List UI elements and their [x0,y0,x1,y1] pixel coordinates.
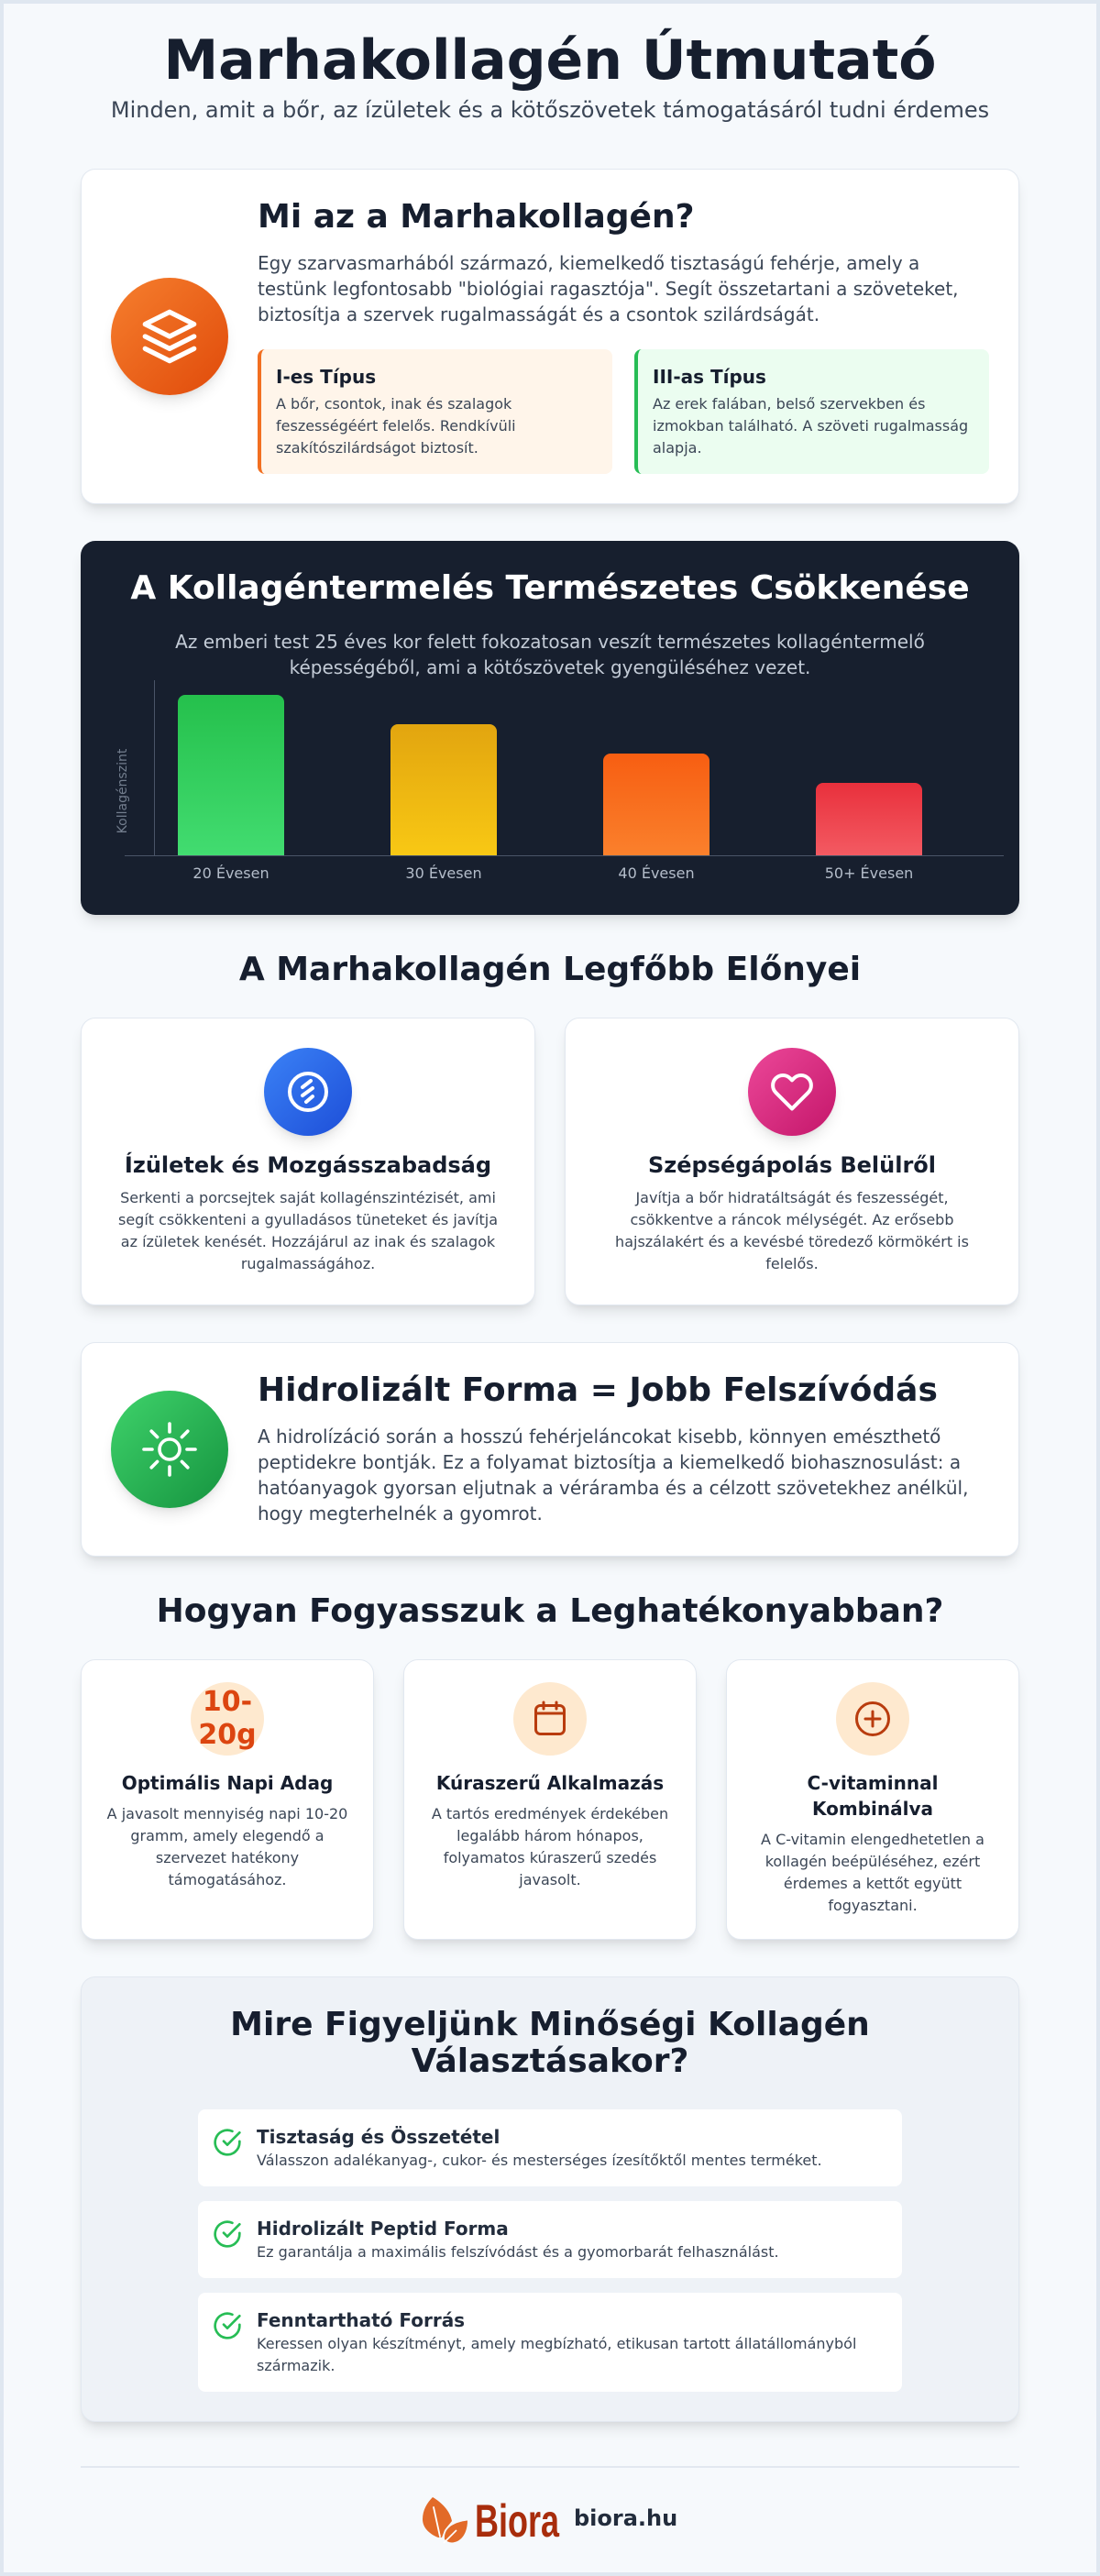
icon: dose: 10- [203,1686,252,1718]
heading: joints: Ízületek és Mozgásszabadság [125,1152,491,1178]
item: hydrolysed peptide: Hidrolizált Peptid Forma [257,2218,509,2240]
text: definition: Egy szarvasmarhából származó, kiemelkedő tisztaságú fehérje, amely a [258,252,919,274]
item: purity: Tisztaság és Összetétel [257,2126,500,2148]
text: dose [106,1805,347,1888]
label: 40 years: 40 Évesen [618,864,695,882]
text: beauty [615,1189,969,1272]
panel: quality checklist [81,1976,1019,2422]
callout: type III: izmokban található. A szöveti rugalmasság [653,417,968,435]
text: beauty: hajszálakért és a kevésbé töredező körmökért is [615,1233,969,1250]
text: decline description: Az emberi test 25 éves kor felett fokozatosan veszít természetes kollagéntermelő [175,631,925,653]
text: dose: szervezet hatékony [156,1849,299,1866]
text: dose: A javasolt mennyiség napi 10-20 [107,1805,347,1822]
website: biora.hu [574,2505,677,2531]
heading: beauty: Szépségápolás Belülről [648,1152,936,1178]
heading: quality: Választásakor? [412,2042,688,2080]
callout: type I: feszességéért felelős. Rendkívüli [276,417,516,435]
text: vitamin C: érdemes a kettőt együtt [784,1875,962,1892]
subtitle: Minden, amit a bőr, az ízületek és a kötőszövetek támogatásáról tudni érdemes [111,97,989,123]
logo [423,2495,560,2545]
text: joints: segít csökkenteni a gyulladásos tüneteket és javítja [118,1211,498,1228]
benefits grid [80,1018,1020,1315]
text: course: legalább három hónapos, [456,1827,644,1844]
heading: hydrolysed: Hidrolizált Forma = Jobb Felszívódás [258,1371,938,1409]
panel: natural decline of collagen production [81,541,1019,915]
text: joints: az ízületek kenését. Hozzájárul az inak és szalagok [121,1233,495,1250]
panel: joints [81,1018,535,1305]
text: course: javasolt. [519,1871,581,1888]
text: definition: biztosítja a szervek rugalmasságát és a csontok szilárdságát. [258,303,820,325]
heading: decline: A Kollagéntermelés Természetes Csökkenése [130,569,970,607]
callout: type I: A bőr, csontok, inak és szalagok [276,395,512,413]
bar chart [116,680,1004,882]
callout: type III [634,349,989,474]
title: Marhakollagén Útmutató [163,28,937,93]
bar: 20 years [178,695,284,855]
callout: type I: I-es Típus [276,366,376,388]
callout: type III: III-as Típus [653,366,766,388]
panel: course [403,1659,697,1940]
callout: type III: alapja. [653,439,702,457]
text: hydrolysed: hogy megterhelnék a gyomrot. [258,1503,543,1525]
callout: type I: szakítószilárdságot biztosít. [276,439,478,457]
icon: calendar [513,1682,587,1756]
text: hydrolysed: peptidekre bontják. Ez a folyamat biztosítja a kiemelkedő biohasznosulást: a [258,1451,961,1473]
text: dose: támogatásához. [168,1871,287,1888]
text: beauty: Javítja a bőr hidratáltságát és feszességét, [635,1189,949,1206]
text: hydrolysed [258,1426,968,1525]
heading: vitamin C: C-vitaminnal [808,1772,938,1794]
heading: benefits: A Marhakollagén Legfőbb Előnyei [239,951,861,988]
icon: dose: 20g [198,1719,257,1751]
text: vitamin C: kollagén beépüléséhez, ezért [765,1853,980,1870]
text: definition: testünk legfontosabb "biológiai ragasztója". Segít összetartani a szöveteket, [258,278,959,300]
text: decline description: képességéből, ami a kötőszövetek gyengüléséhez vezet. [290,656,810,678]
text: course: A tartós eredmények érdekében [432,1805,668,1822]
header [111,28,989,123]
panel: beauty [565,1018,1019,1305]
heading: quality [230,2006,870,2080]
text: beauty: csökkentve a ráncok mélységét. Az erősebb [631,1211,953,1228]
icon: layers [111,278,228,395]
panel: daily dose [81,1659,374,1940]
icon: plus [836,1682,909,1756]
heading: vitamin C: Kombinálva [812,1798,933,1820]
heading: dose: Optimális Napi Adag [122,1772,333,1794]
heading: vitamin C [808,1772,938,1820]
panel: what is beef collagen [81,169,1019,504]
collagen types [258,349,989,474]
item: hydrolysed peptide [198,2201,902,2278]
heading: quality: Mire Figyeljünk Minőségi Kollagén [230,2006,870,2043]
item: sustainable source: Keressen olyan készítményt, amely megbízható, etikusan tartott állatállományból [257,2335,856,2352]
text: course [432,1805,668,1888]
text: beauty: felelős. [765,1255,819,1272]
icon: joint [264,1048,352,1136]
item: purity: Válasszon adalékanyag-, cukor- és mesterséges ízesítőktől mentes terméket. [257,2152,822,2169]
icon: heart [748,1048,836,1136]
bar: 50+ years [816,783,922,855]
usage grid [80,1659,1020,1949]
text: vitamin C: A C-vitamin elengedhetetlen a [761,1831,984,1848]
callout: type I [258,349,612,474]
label: 20 years: 20 Évesen [192,864,270,882]
text: course: folyamatos kúraszerű szedés [444,1849,656,1866]
icon: leaves [423,2497,468,2543]
footer [81,2466,1019,2572]
text: decline description [175,631,925,678]
text: hydrolysed: hatóanyagok gyorsan eljutnak a véráramba és a célzott szövetekhez anélkül, [258,1477,968,1499]
axis label: Kollagénszint [116,749,130,833]
item: sustainable source: származik. [257,2357,335,2374]
item: sustainable source: Fenntartható Forrás [257,2309,465,2331]
panel: hydrolysed form [81,1342,1019,1557]
text: joints: rugalmasságához. [241,1255,375,1272]
heading: course: Kúraszerű Alkalmazás [436,1772,664,1794]
label: 50+ years: 50+ Évesen [825,864,913,882]
heading: how to consume: Hogyan Fogyasszuk a Leghatékonyabban? [157,1592,943,1630]
item: hydrolysed peptide: Ez garantálja a maximális felszívódást és a gyomorbarát felhasználást. [257,2243,779,2261]
panel: vitamin C [726,1659,1019,1940]
bar: 30 years [390,724,497,855]
text: vitamin C: fogyasztani. [828,1897,918,1914]
item: purity [198,2109,902,2186]
text: definition [258,252,959,325]
icon: sun [111,1391,228,1508]
text: joints: Serkenti a porcsejtek saját kollagénszintézisét, ami [120,1189,496,1206]
label: 30 years: 30 Évesen [405,864,482,882]
text: dose: gramm, amely elegendő a [130,1827,324,1844]
bar: 40 years [603,754,710,855]
callout: type III: Az erek falában, belső szervekben és [653,395,925,413]
text: joints [118,1189,498,1272]
heading: what is it: Mi az a Marhakollagén? [258,198,694,236]
icon: dose [191,1682,264,1756]
item: sustainable source [198,2293,902,2392]
text: vitamin C [761,1831,984,1914]
text: hydrolysed: A hidrolízáció során a hosszú fehérjeláncokat kisebb, könnyen emészthető [258,1426,940,1448]
